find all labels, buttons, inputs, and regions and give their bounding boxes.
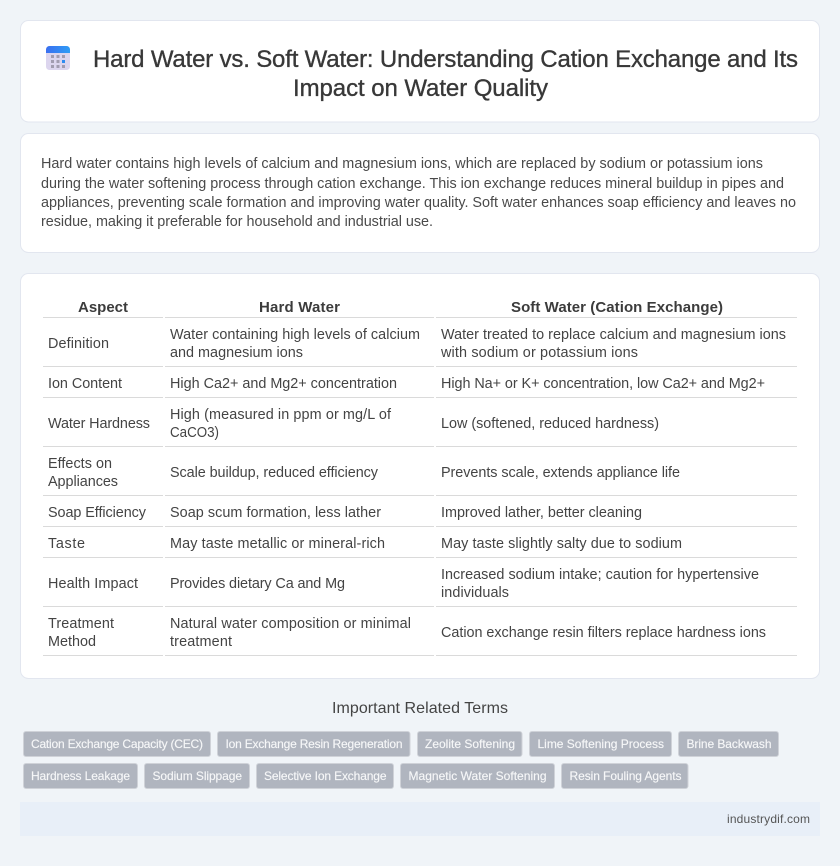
panel: introduction text [20,134,820,252]
row: effects on appliances: Prevents scale, extends appliance life [441,465,680,481]
row: taste: Taste [48,536,85,552]
chip: Magnetic Water Softening [408,769,546,783]
panel: introduction text: residue, making it preferable for household and industrial use. [41,214,433,230]
title [93,46,798,102]
row: ion content: Ion Content [48,376,122,392]
footer [20,802,820,836]
chip [144,764,250,788]
panel: introduction text: appliances, preventing scale formation and improving water quality. Soft water enhances soap efficiency and leaves no [41,195,796,211]
footer: industrydif.com [727,812,810,826]
row: health impact: Health Impact [48,576,138,592]
row: taste [48,536,682,552]
chip [24,764,138,788]
row: definition: with sodium or potassium ions [440,345,638,361]
chip: Cation Exchange Capacity (CEC) [31,737,203,751]
row: effects on appliances: Appliances [48,474,118,490]
chip: Resin Fouling Agents [570,769,682,783]
chip: Brine Backwash [686,737,772,751]
row: definition: Water treated to replace calcium and magnesium ions [441,327,786,343]
chip [562,764,688,788]
row: definition: Definition [48,336,109,352]
chip: Selective Ion Exchange [264,769,387,783]
chip [418,732,522,756]
chip [530,732,672,756]
chip [400,764,554,788]
row: water hardness: High (measured in ppm or mg/L of [170,407,392,423]
row: definition: and magnesium ions [170,345,303,361]
row: effects on appliances: Scale buildup, reduced efficiency [170,465,379,481]
row: treatment method: Cation exchange resin filters replace hardness ions [441,625,766,641]
row: soap efficiency: Soap Efficiency [48,505,147,521]
chip: Zeolite Softening [425,737,515,751]
title: Hard Water vs. Soft Water: Understanding Cation Exchange and Its [93,46,798,73]
panel: introduction text: during the water softening process through cation exchange. This ion exchange reduces mineral buildup in pipes and [41,176,784,192]
row: soap efficiency [48,505,642,521]
chip [678,732,778,756]
title: Impact on Water Quality [293,75,548,102]
row: health impact: Increased sodium intake; caution for hypertensive [441,567,759,583]
chip [218,732,410,756]
row: treatment method: Method [48,634,96,650]
panel: header [20,20,820,122]
row: treatment method: treatment [170,634,232,650]
row: water hardness: Water Hardness [48,416,150,432]
table header: Aspect [78,299,128,316]
row: effects on appliances: Effects on [48,456,112,472]
chip: Ion Exchange Resin Regeneration [226,737,402,751]
row: soap efficiency: Improved lather, better cleaning [441,505,642,521]
chip [256,764,394,788]
panel: comparison table [20,274,820,678]
row: treatment method: Natural water composition or minimal [170,616,411,632]
chip [24,732,210,756]
row: definition: Water containing high levels of calcium [170,327,420,343]
chip: Lime Softening Process [538,737,664,751]
row: health impact: Provides dietary Ca and Mg [170,576,345,592]
table header [78,299,723,316]
row: ion content [48,376,765,392]
row: health impact [48,567,759,601]
row: ion content: High Ca2+ and Mg2+ concentration [170,376,397,392]
chip: Hardness Leakage [31,769,130,783]
row: water hardness: CaCO3) [170,425,219,441]
table header: Soft Water (Cation Exchange) [511,299,723,316]
row: water hardness: Low (softened, reduced hardness) [441,416,659,432]
icon: calendar grid [46,46,70,70]
row: treatment method: Treatment [48,616,114,632]
row: ion content: High Na+ or K+ concentration, low Ca2+ and Mg2+ [441,376,765,392]
row: taste: May taste metallic or mineral-rich [170,536,385,552]
heading: important related terms: Important Related Terms [332,700,508,717]
row: soap efficiency: Soap scum formation, less lather [170,505,381,521]
row: treatment method [48,616,766,650]
row: definition [48,327,786,361]
row: health impact: individuals [441,585,509,601]
chip: Sodium Slippage [152,769,242,783]
table header: Hard Water [259,299,340,316]
panel: introduction text: Hard water contains high levels of calcium and magnesium ions, which are replaced by sodium or potassium ions [41,156,763,172]
row: water hardness [48,407,659,441]
related terms chips [24,732,778,788]
row: taste: May taste slightly salty due to sodium [441,536,682,552]
row: effects on appliances [48,456,680,490]
